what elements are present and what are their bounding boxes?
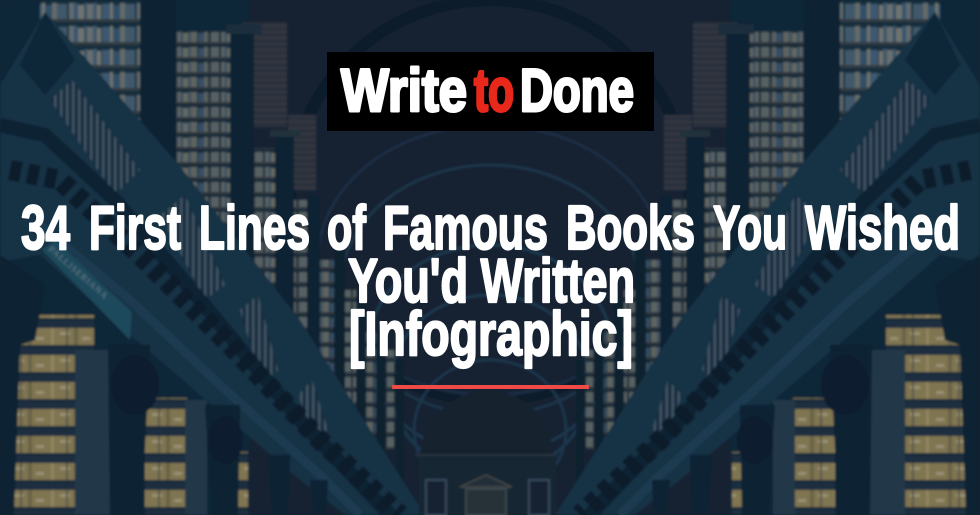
title: You'd Written: [348, 247, 635, 316]
logo: WritetoDone: Write: [341, 57, 467, 124]
teal name sign: [42, 240, 132, 340]
title: [21, 194, 960, 369]
red divider: [392, 385, 589, 389]
title: Lines: [199, 194, 310, 263]
title: First: [89, 194, 181, 263]
logo: WritetoDone: to: [474, 57, 514, 124]
logo: WritetoDone: Done: [520, 57, 634, 124]
logo: WritetoDone: [327, 52, 654, 131]
title: Famous: [383, 194, 548, 263]
left half of hall: [0, 0, 425, 515]
right half of hall: [555, 0, 980, 515]
central vault: [250, 0, 730, 515]
title: [Infographic]: [349, 300, 633, 369]
end wall with door and windows: [415, 390, 557, 515]
title: of: [327, 194, 366, 263]
title: 34: [21, 194, 70, 263]
teal name sign: PALLISERIANA: [47, 244, 110, 301]
title: You: [713, 194, 787, 263]
title: Books: [566, 194, 695, 263]
